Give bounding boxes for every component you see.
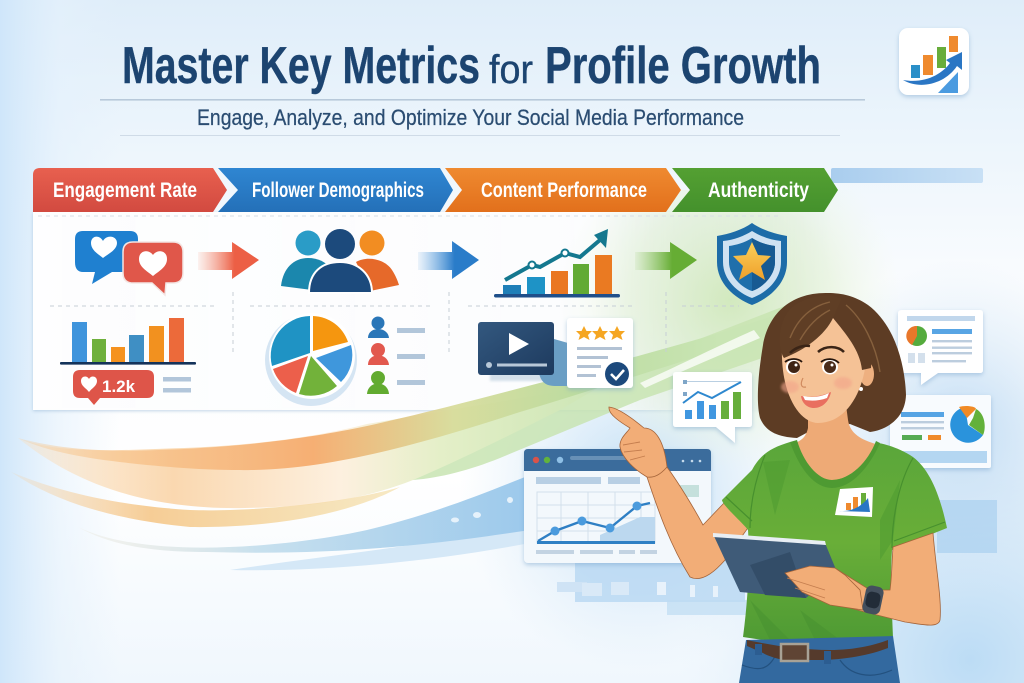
- watch: [861, 584, 885, 616]
- like badge: [73, 370, 191, 405]
- eyes and brows: [790, 346, 810, 353]
- browser dashboard: [524, 449, 711, 563]
- sleeve seams: [726, 455, 945, 548]
- banner: metric steps: [33, 168, 983, 212]
- step: Engagement Rate: Engagement Rate: [53, 179, 197, 202]
- right arm: [785, 533, 940, 625]
- panel: metrics board: [33, 212, 833, 410]
- step: Follower Demographics: [218, 168, 453, 212]
- icon: shield with star: [717, 223, 787, 305]
- tablet: [713, 534, 837, 598]
- fingers on tablet: [785, 566, 863, 610]
- pie chart: demographics: [265, 313, 357, 406]
- shirt badge: [835, 487, 873, 517]
- step: Content Performance: Content Performance: [481, 179, 647, 202]
- like badge: 1.2k: [102, 377, 136, 396]
- ear: [860, 362, 874, 386]
- title: Master Key Metrics: [122, 37, 480, 95]
- bar chart: engagement: [60, 318, 196, 365]
- woman presenter: [609, 293, 947, 683]
- raised arm: [647, 467, 750, 579]
- dashed dividers: [38, 216, 780, 355]
- neck and chest: [795, 405, 876, 480]
- arrow: blue: [418, 241, 479, 279]
- step: Follower Demographics: Follower Demographics: [252, 179, 424, 202]
- arrow: green: [635, 242, 697, 279]
- shirt: [722, 442, 947, 643]
- arrow: red: [198, 242, 259, 279]
- title: [122, 37, 821, 95]
- demographic legend: [367, 316, 425, 394]
- pointing hand: [609, 407, 667, 477]
- title: for: [489, 48, 533, 92]
- logo icon: [899, 28, 969, 95]
- belt: [747, 640, 888, 660]
- report speech card: [898, 310, 983, 385]
- step: Authenticity: Authenticity: [708, 179, 809, 202]
- title: Profile Growth: [545, 37, 821, 95]
- subtitle: Engage, Analyze, and Optimize Your Social Media Performance: [197, 105, 744, 130]
- decorative data blocks behind dashboard: [557, 500, 997, 615]
- face: [782, 318, 866, 423]
- swoosh ribbons: [11, 190, 900, 570]
- step: Authenticity: [672, 168, 983, 212]
- icon: trend chart: [494, 229, 620, 298]
- icon: people group: [281, 229, 399, 293]
- icon: heart chat bubbles: [75, 231, 183, 295]
- step: Engagement Rate: [33, 168, 227, 212]
- jeans: [739, 636, 900, 683]
- video player: [478, 322, 575, 386]
- analytics card: [890, 395, 991, 468]
- fringe: [780, 296, 850, 358]
- hair back: [758, 293, 906, 438]
- chart speech card: [673, 372, 752, 443]
- review card: [567, 318, 633, 388]
- mouth: [801, 392, 831, 408]
- step: Content Performance: [445, 168, 681, 212]
